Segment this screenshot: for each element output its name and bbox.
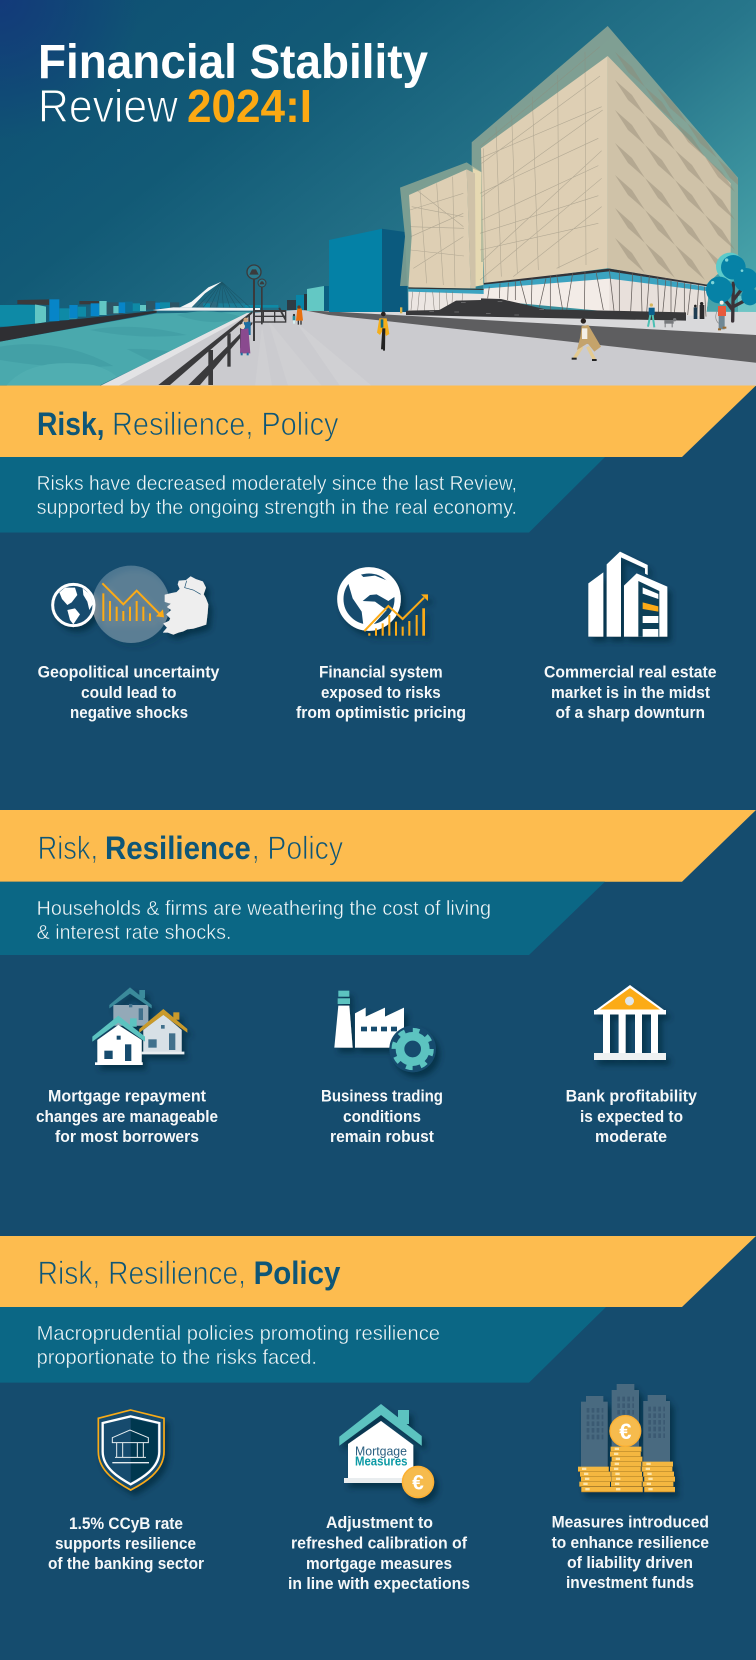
pavement and road <box>100 310 756 386</box>
summary band: Risk <box>0 457 605 532</box>
icon: city towers and euro coin stacks: € <box>619 1419 631 1444</box>
icon: globe, falling chart and Ireland <box>53 566 208 643</box>
heading band: Policy: Policy <box>254 1255 341 1291</box>
caption: mortgage repayment <box>36 1087 218 1146</box>
caption: mortgage repayment: Mortgage repayment <box>48 1087 206 1106</box>
icon: factory and gear <box>334 991 436 1072</box>
caption: commercial real estate: market is in the midst <box>551 683 710 702</box>
heading band: Resilience <box>0 810 756 882</box>
glass base of the building <box>406 269 709 321</box>
caption: geopolitical uncertainty: could lead to <box>81 683 176 702</box>
caption: liability driven investment funds: to enhance resilience <box>552 1533 709 1552</box>
caption: business trading: Business trading <box>321 1087 443 1106</box>
tree <box>706 253 756 321</box>
lamp posts and river railing <box>158 265 286 385</box>
caption: financial system <box>296 663 466 722</box>
icon: city towers and euro coin stacks <box>578 1384 675 1492</box>
title <box>38 36 428 132</box>
summary band: Policy: proportionate to the risks faced. <box>37 1346 317 1369</box>
summary band: Risk: Risks have decreased moderately since the last Review, <box>37 472 517 495</box>
caption: liability driven investment funds: Measures introduced <box>552 1513 709 1532</box>
caption: mortgage measures <box>288 1513 470 1593</box>
title: Review <box>38 80 179 132</box>
section: Resilience <box>0 810 756 1146</box>
city skyline on the far quay <box>0 299 278 327</box>
heading band: Resilience: Resilience <box>105 830 251 866</box>
heading band: Policy <box>0 1236 756 1307</box>
heading band: Resilience: Risk, <box>38 830 98 866</box>
small central bank wing <box>400 162 483 288</box>
title: 2024:I <box>187 80 312 132</box>
icon: bank building <box>594 985 666 1060</box>
icon: globe and rising chart <box>340 570 428 636</box>
heading band: Risk: Risk, <box>37 406 104 442</box>
caption: commercial real estate <box>544 663 716 722</box>
caption: commercial real estate: of a sharp downturn <box>556 703 705 722</box>
heading band: Resilience: , Policy <box>252 830 343 866</box>
pedestrians on the main walkway <box>377 301 726 361</box>
caption: mortgage repayment: changes are manageable <box>36 1107 218 1126</box>
icon: mortgage measures house: € <box>412 1472 424 1494</box>
heading band: Risk: Resilience, Policy <box>112 406 338 442</box>
facade diamond pattern <box>615 52 747 283</box>
caption: mortgage measures: mortgage measures <box>306 1554 452 1573</box>
caption: mortgage measures: Adjustment to <box>326 1513 433 1532</box>
caption: business trading <box>321 1087 443 1146</box>
summary band: Risk: supported by the ongoing strength in the real economy. <box>37 496 517 519</box>
caption: commercial real estate: Commercial real estate <box>544 663 716 682</box>
caption: bank profitability: is expected to <box>580 1107 683 1126</box>
caption: bank profitability: Bank profitability <box>566 1087 698 1106</box>
heading band: Policy: Risk, Resilience, <box>38 1255 246 1291</box>
facade line grid <box>480 47 603 283</box>
icon: commercial office buildings <box>588 552 667 637</box>
caption: mortgage measures: in line with expectations <box>288 1574 470 1593</box>
caption: CCyB rate: 1.5% CCyB rate <box>69 1514 183 1533</box>
caption: business trading: remain robust <box>330 1127 434 1146</box>
caption: liability driven investment funds: investment funds <box>566 1573 694 1592</box>
icon: shield with bank <box>98 1410 164 1490</box>
caption: financial system: exposed to risks <box>321 683 441 702</box>
caption: CCyB rate <box>48 1514 204 1573</box>
summary band: Resilience: Households & firms are weathering the cost of living <box>37 897 491 920</box>
hero illustration <box>0 0 756 386</box>
section: Policy <box>0 1236 756 1593</box>
icon: mortgage measures house <box>339 1404 434 1498</box>
caption: business trading: conditions <box>343 1107 421 1126</box>
caption: CCyB rate: supports resilience <box>55 1534 196 1553</box>
caption: mortgage repayment: for most borrowers <box>55 1127 199 1146</box>
pedestrians on the left quay <box>240 305 303 355</box>
icon: mortgage measures house: Measures <box>355 1454 408 1468</box>
section: Risk <box>0 386 756 722</box>
heading band: Risk <box>0 386 756 457</box>
caption: bank profitability <box>566 1087 698 1146</box>
quay wall and river <box>0 311 253 385</box>
caption: financial system: Financial system <box>319 663 443 682</box>
caption: geopolitical uncertainty: Geopolitical uncertainty <box>38 663 220 682</box>
title: Financial Stability <box>38 36 428 89</box>
caption: geopolitical uncertainty <box>38 663 220 722</box>
main central bank building <box>472 26 747 285</box>
summary band: Resilience: & interest rate shocks. <box>37 921 231 944</box>
caption: liability driven investment funds: of liability driven <box>567 1553 693 1572</box>
summary band: Policy: Macroprudential policies promoting resilience <box>37 1322 440 1345</box>
background blue buildings <box>287 229 408 312</box>
summary band: Policy <box>0 1307 606 1383</box>
icon: mortgage measures house: Mortgage <box>355 1444 407 1458</box>
summary band: Resilience <box>0 882 605 955</box>
icon: three houses <box>92 987 187 1065</box>
caption: CCyB rate: of the banking sector <box>48 1554 204 1573</box>
caption: liability driven investment funds <box>552 1513 709 1592</box>
caption: geopolitical uncertainty: negative shocks <box>70 703 188 722</box>
caption: bank profitability: moderate <box>595 1127 667 1146</box>
Samuel Beckett bridge <box>153 282 260 311</box>
caption: financial system: from optimistic pricing <box>296 703 466 722</box>
caption: mortgage measures: refreshed calibration of <box>291 1534 467 1553</box>
